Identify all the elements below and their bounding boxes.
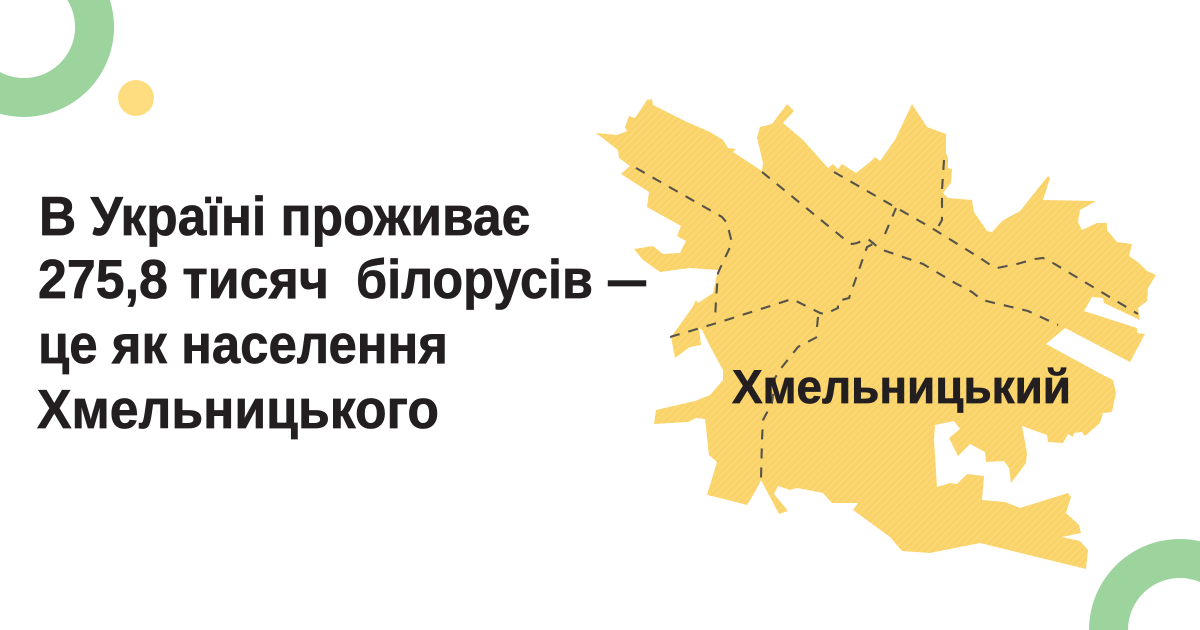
headline: 275,8 тисяч <box>38 248 329 310</box>
map: Khmelnytskyi city outline <box>596 99 1156 569</box>
decorative dot: yellow <box>118 80 154 116</box>
map label: Хмельницький <box>732 360 1071 413</box>
decorative ring: bottom right <box>1089 539 1200 630</box>
headline: В Україні проживає <box>39 185 530 247</box>
headline: — <box>608 248 646 310</box>
decorative ring: top left <box>0 0 114 117</box>
headline: білорусів <box>356 248 593 310</box>
district boundaries <box>636 160 1138 478</box>
headline <box>37 185 646 440</box>
headline: Хмельницького <box>37 378 439 440</box>
headline: це як населення <box>38 313 448 375</box>
